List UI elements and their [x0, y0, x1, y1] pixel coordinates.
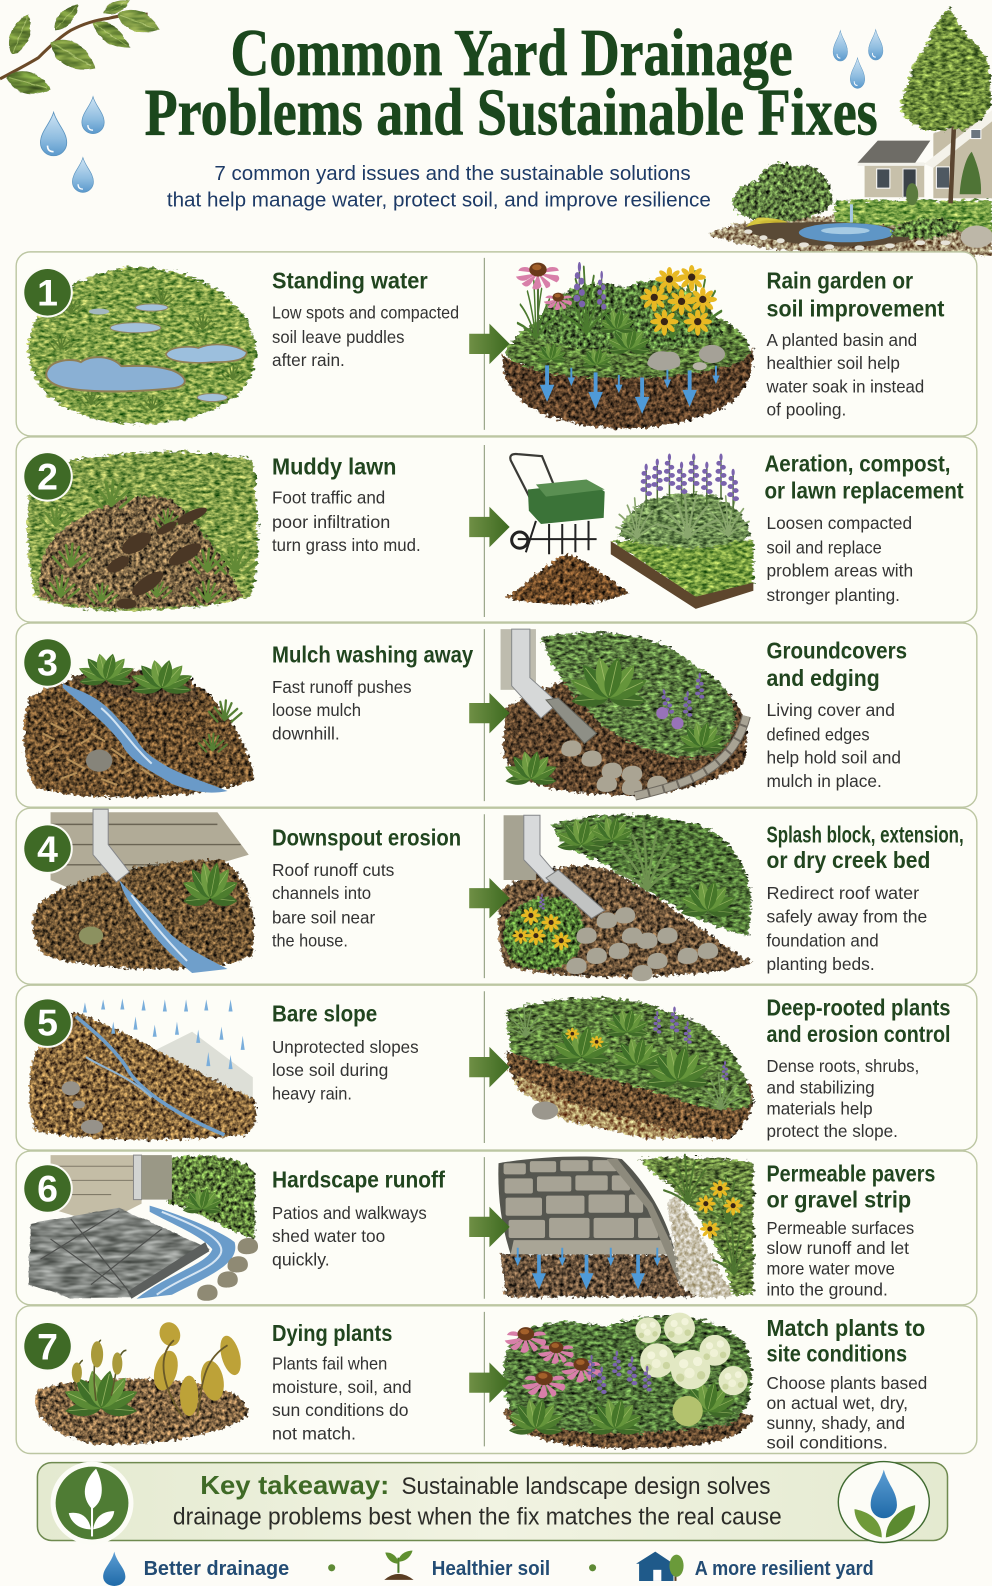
- fix text: Dense roots, shrubs,: [766, 1056, 919, 1076]
- panel: row 6: [16, 1151, 977, 1305]
- heading: bare slope: Bare slope: [272, 1001, 377, 1027]
- panel: row 2: [16, 437, 977, 622]
- illustration: muddy lawn: [27, 452, 258, 610]
- heading: standing water: Standing water: [272, 267, 428, 293]
- heading: groundcovers: Groundcovers: [766, 637, 907, 663]
- fix text: slow runoff and let: [766, 1238, 909, 1258]
- heading: deep-rooted plants: and erosion control: [766, 1021, 951, 1047]
- fix text: soil conditions.: [766, 1432, 888, 1452]
- problem text: [272, 1203, 427, 1269]
- benefit: resilient yard: A more resilient yard: [695, 1558, 874, 1580]
- fix text: healthier soil help: [766, 353, 900, 373]
- fix text: Living cover and: [766, 700, 895, 720]
- arrow: problem to fix: [469, 507, 510, 547]
- fix text: on actual wet, dry,: [766, 1393, 908, 1413]
- number badge 3: 3: [37, 642, 58, 684]
- fix text: Redirect roof water: [766, 883, 919, 903]
- number badge 5: [22, 997, 73, 1048]
- fix text: foundation and: [766, 931, 879, 951]
- fix text: soil and replace: [766, 537, 882, 557]
- key takeaway text: drainage problems best when the fix matches the real cause: [173, 1503, 782, 1530]
- arrow: problem to fix: [469, 878, 510, 918]
- problem text: [272, 860, 394, 951]
- fix text: safely away from the: [766, 906, 927, 926]
- number badge 1: 1: [37, 271, 58, 313]
- problem text: Patios and walkways: [272, 1203, 427, 1223]
- panel: row 7: [16, 1306, 977, 1453]
- heading: downspout erosion: Downspout erosion: [272, 825, 461, 851]
- fix text: planting beds.: [766, 954, 875, 974]
- heading: mulch washing away: Mulch washing away: [272, 642, 473, 668]
- panel: row 5: [16, 985, 977, 1150]
- heading: splash block: [766, 822, 964, 873]
- fix text: Permeable surfaces: [766, 1218, 914, 1238]
- fix text: more water move: [766, 1258, 895, 1278]
- number badge 3: [22, 637, 73, 688]
- heading: deep-rooted plants: Deep-rooted plants: [766, 995, 951, 1021]
- fix text: [766, 330, 924, 420]
- heading: aeration: [764, 450, 964, 504]
- fix text: problem areas with: [766, 561, 913, 581]
- problem text: sun conditions do: [272, 1400, 409, 1420]
- icon: drop: [103, 1552, 125, 1586]
- number badge 5: 5: [37, 1002, 58, 1044]
- problem text: channels into: [272, 883, 371, 903]
- problem text: heavy rain.: [272, 1083, 352, 1103]
- bullet: [589, 1564, 596, 1571]
- arrow: problem to fix: [469, 1047, 510, 1087]
- fix text: [766, 883, 927, 974]
- problem text: the house.: [272, 931, 348, 951]
- fix text: defined edges: [766, 724, 870, 744]
- number badge 4: 4: [37, 828, 58, 870]
- heading: match plants: [766, 1315, 925, 1366]
- problem text: turn grass into mud.: [272, 535, 421, 555]
- fix text: materials help: [766, 1099, 873, 1119]
- problem text: [272, 488, 421, 555]
- problem text: poor infiltration: [272, 512, 390, 532]
- number badge 7: 7: [37, 1325, 58, 1367]
- problem text: Low spots and compacted: [272, 303, 459, 323]
- panel: row 4: [16, 808, 977, 984]
- illustration: standing water: [28, 267, 256, 424]
- heading: rain garden: soil improvement: [766, 296, 945, 322]
- heading: aeration: Aeration, compost,: [764, 450, 951, 476]
- illustration: rain garden: [502, 262, 754, 429]
- fix text: Loosen compacted: [766, 513, 912, 533]
- number badge 6: [22, 1163, 73, 1214]
- icon: leaf badge: [51, 1462, 133, 1545]
- number badge 1: [22, 267, 73, 318]
- fix text: protect the slope.: [766, 1121, 898, 1141]
- illustration: matched plants: [503, 1313, 753, 1448]
- problem text: Fast runoff pushes: [272, 677, 412, 697]
- heading: permeable pavers: Permeable pavers: [766, 1160, 935, 1186]
- fix text: [766, 1373, 927, 1452]
- heading: groundcovers: [766, 637, 907, 691]
- fix text: A planted basin and: [766, 330, 917, 350]
- number badge 2: [22, 451, 73, 502]
- illustration: mulch washing away: [24, 653, 255, 797]
- problem text: Plants fail when: [272, 1354, 387, 1374]
- fix text: sunny, shady, and: [766, 1413, 905, 1433]
- problem text: Roof runoff cuts: [272, 860, 394, 880]
- illustration: dying plants: [36, 1319, 249, 1444]
- icon: house and tree: [636, 1552, 684, 1581]
- heading: match plants: Match plants to: [766, 1315, 925, 1341]
- problem text: [272, 1037, 419, 1103]
- illustration: aerator, compost and planted lawn: [506, 454, 753, 609]
- header: branch illustration: [0, 0, 163, 99]
- heading: permeable pavers: or gravel strip: [766, 1187, 911, 1213]
- number badge 4: [22, 823, 73, 874]
- heading: permeable pavers: [766, 1160, 935, 1213]
- heading: deep-rooted plants: [766, 995, 951, 1047]
- number badge 2: 2: [37, 456, 58, 498]
- key takeaway text: [173, 1470, 782, 1530]
- fix text: [766, 1056, 919, 1141]
- problem text: moisture, soil, and: [272, 1377, 412, 1397]
- problem text: Foot traffic and: [272, 488, 385, 508]
- number badge 7: [22, 1321, 73, 1372]
- header: house, tree and rain garden illustration: [708, 8, 992, 257]
- key takeaway text: Sustainable landscape design solves: [401, 1473, 771, 1500]
- subtitle: 7 common yard issues and the sustainable solutions: [214, 163, 691, 185]
- problem text: [272, 677, 412, 743]
- problem text: Unprotected slopes: [272, 1037, 419, 1057]
- key takeaway text: Key takeaway:: [200, 1470, 389, 1500]
- heading: splash block: or dry creek bed: [766, 847, 930, 873]
- heading: dying plants: Dying plants: [272, 1320, 392, 1346]
- key takeaway banner: [37, 1462, 948, 1545]
- illustration: splash block and dry creek bed: [498, 815, 753, 981]
- title: [145, 17, 878, 150]
- problem text: quickly.: [272, 1249, 330, 1269]
- problem text: downhill.: [272, 723, 340, 743]
- illustration: downspout with groundcovers and edging: [501, 629, 747, 796]
- number badge 6: 6: [37, 1168, 58, 1210]
- problem text: not match.: [272, 1423, 356, 1443]
- panel: row 1: [16, 252, 977, 436]
- fix text: help hold soil and: [766, 748, 901, 768]
- problem text: [272, 1354, 412, 1443]
- fix text: into the ground.: [766, 1280, 888, 1300]
- water drops left: [40, 97, 104, 192]
- bullet: [328, 1564, 335, 1571]
- problem text: loose mulch: [272, 700, 361, 720]
- panel: row 3: [16, 623, 977, 807]
- problem text: soil leave puddles: [272, 327, 404, 347]
- illustration: downspout erosion: [33, 809, 254, 973]
- fix text: and stabilizing: [766, 1077, 875, 1097]
- water drops right: [833, 30, 883, 88]
- arrow: problem to fix: [469, 1207, 510, 1247]
- problem text: after rain.: [272, 350, 345, 370]
- illustration: bare slope with rain: [29, 998, 256, 1140]
- fix text: stronger planting.: [766, 585, 900, 605]
- heading: groundcovers: and edging: [766, 665, 880, 691]
- fix text: of pooling.: [766, 400, 846, 420]
- fix text: [766, 513, 913, 605]
- icon: drop and leaves badge: [838, 1462, 929, 1543]
- heading: muddy lawn: Muddy lawn: [272, 453, 396, 479]
- arrow: problem to fix: [469, 324, 510, 364]
- problem text: [272, 303, 459, 370]
- fix text: mulch in place.: [766, 771, 882, 791]
- fix text: Choose plants based: [766, 1373, 927, 1393]
- illustration: hardscape runoff: [28, 1155, 258, 1301]
- icon: sprout in soil: [384, 1551, 414, 1580]
- problem text: lose soil during: [272, 1060, 388, 1080]
- fix text: [766, 1218, 914, 1300]
- illustration: permeable pavers and gravel strip: [498, 1155, 755, 1297]
- heading: rain garden: [766, 267, 945, 322]
- heading: match plants: site conditions: [766, 1340, 907, 1366]
- arrow: problem to fix: [469, 693, 510, 733]
- arrow: problem to fix: [469, 1362, 510, 1403]
- heading: aeration: or lawn replacement: [764, 478, 964, 504]
- heading: hardscape runoff: Hardscape runoff: [272, 1166, 445, 1192]
- fix text: [766, 700, 901, 791]
- footer benefits: [103, 1551, 874, 1586]
- heading: rain garden: Rain garden or: [766, 267, 913, 293]
- benefit: better drainage: Better drainage: [144, 1558, 289, 1580]
- illustration: deep-rooted plants on slope: [506, 998, 753, 1139]
- benefit: healthier soil: Healthier soil: [432, 1558, 550, 1580]
- problem text: bare soil near: [272, 907, 375, 927]
- subtitle: that help manage water, protect soil, and improve resilience: [167, 189, 711, 211]
- fix text: water soak in instead: [766, 376, 924, 396]
- subtitle: [167, 163, 711, 211]
- problem text: shed water too: [272, 1226, 385, 1246]
- title: Common Yard Drainage: [231, 17, 793, 90]
